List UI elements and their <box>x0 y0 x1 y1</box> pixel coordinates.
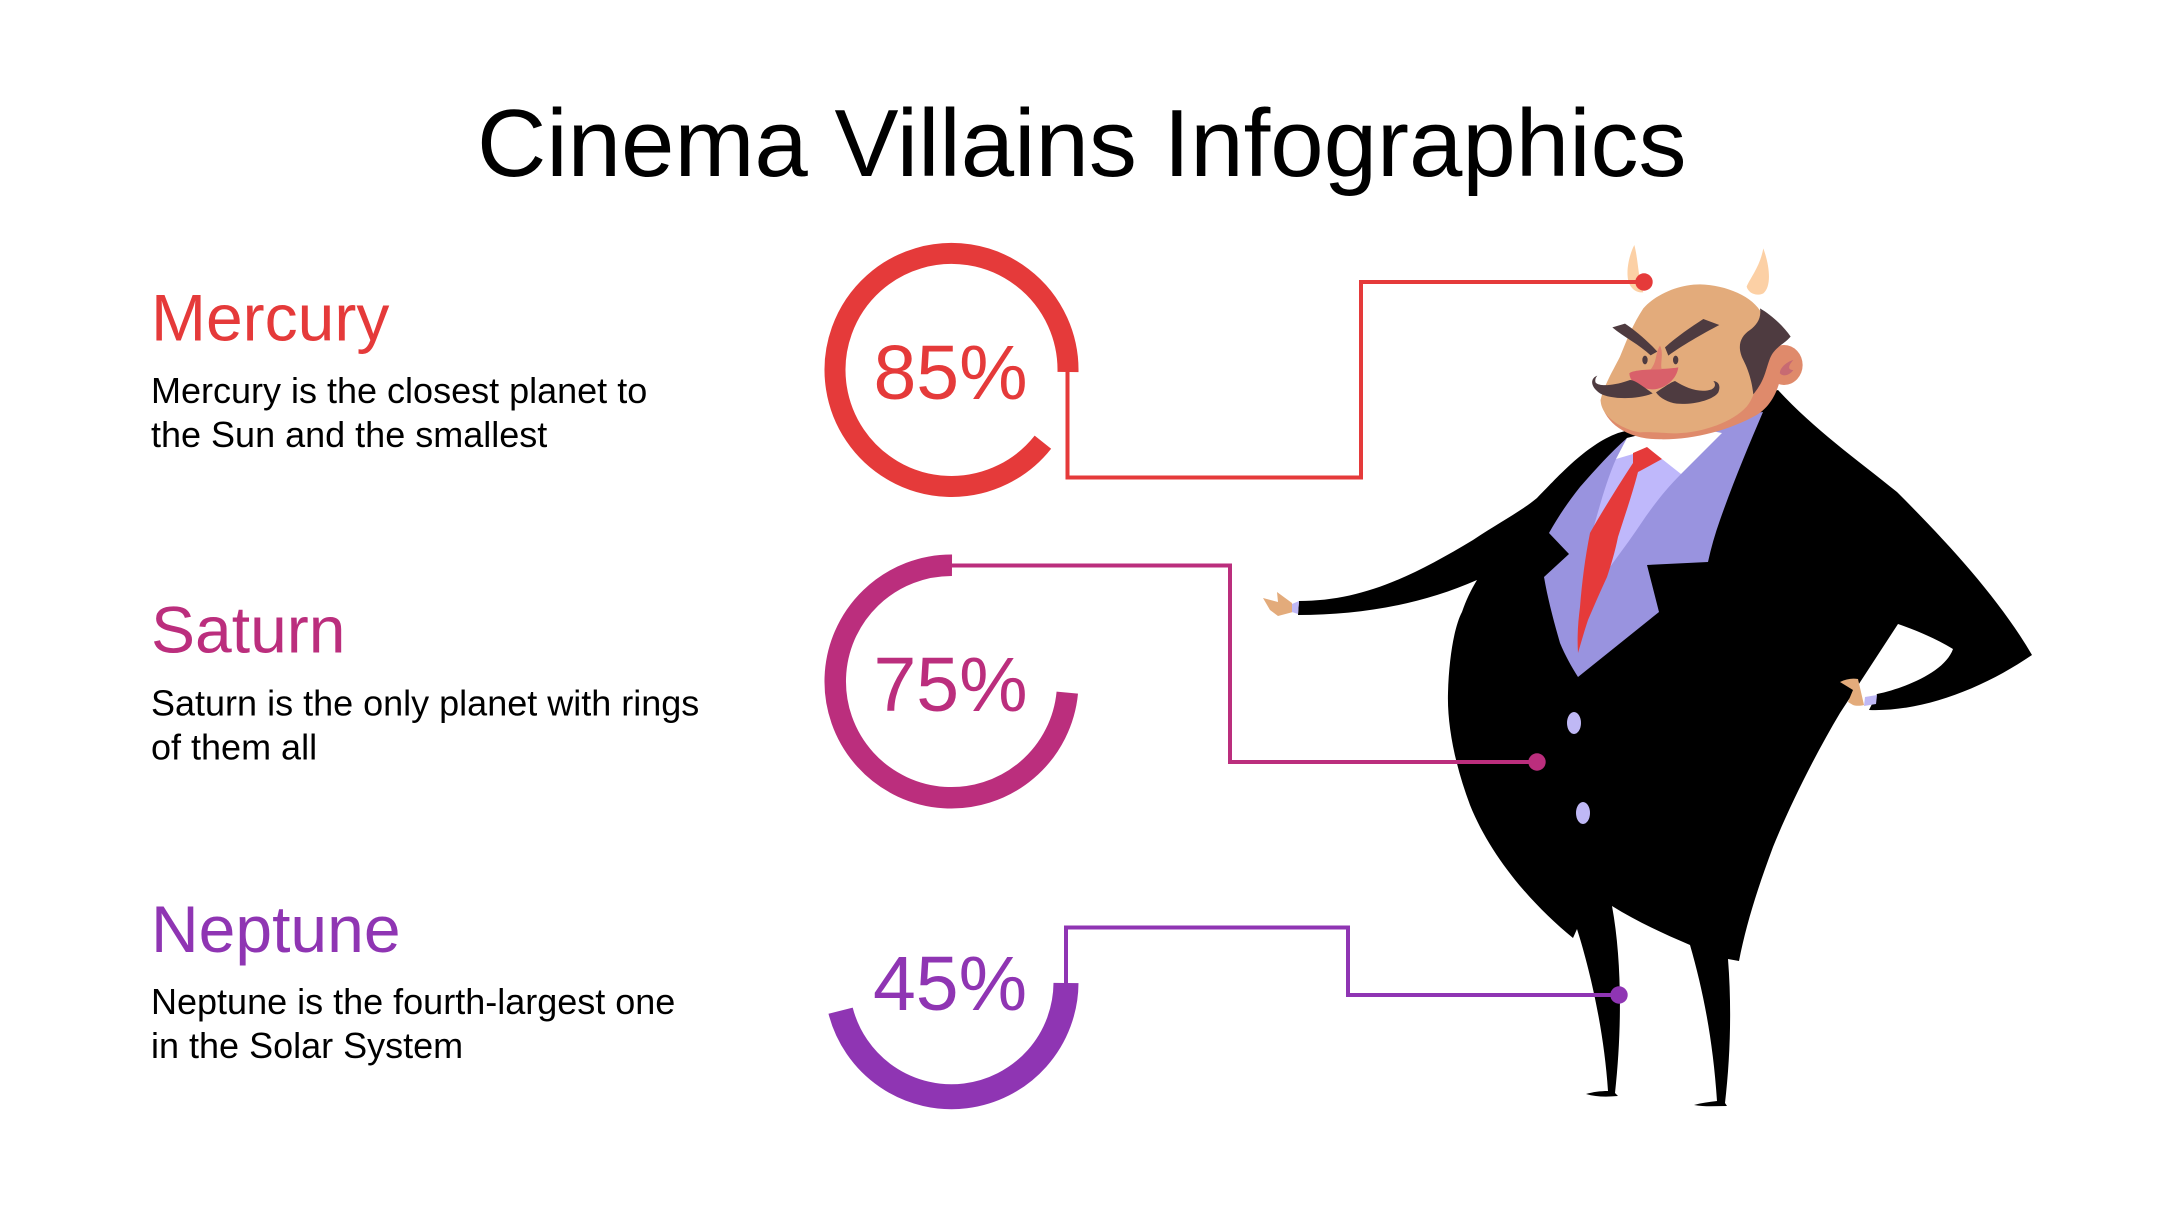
text: Neptune description: in the Solar System <box>151 1025 463 1066</box>
dot: horn <box>1635 273 1653 291</box>
dot: leg <box>1610 986 1628 1004</box>
left hand <box>1263 592 1299 616</box>
value: 45%: 45% <box>873 941 1027 1027</box>
black suit <box>1298 390 2032 1106</box>
panel: saturn <box>151 565 1546 798</box>
ring: 75% <box>835 565 1067 798</box>
right hand <box>1840 679 1877 706</box>
text: Neptune description: Neptune is the fourth-largest one <box>151 981 675 1022</box>
heading: Mercury: Mercury <box>151 280 389 354</box>
text: Saturn description: of them all <box>151 726 317 768</box>
connector: neptune to leg <box>1066 928 1619 995</box>
white collar <box>1616 425 1722 474</box>
title: Cinema Villains Infographics <box>477 90 1687 197</box>
buttons <box>1567 712 1590 824</box>
eyes <box>1642 356 1648 364</box>
panel: neptune <box>151 892 1628 1097</box>
ear <box>1765 345 1803 385</box>
heading: Saturn: Saturn <box>151 592 345 666</box>
villain character illustration <box>1263 245 2032 1106</box>
neck shade <box>1601 357 1780 439</box>
face <box>1601 284 1762 433</box>
text: Mercury description: the Sun and the smallest <box>151 414 547 455</box>
heading: Neptune: Neptune <box>151 892 401 966</box>
lilac shirt <box>1592 454 1681 567</box>
purple lapels <box>1544 412 1763 677</box>
ring: 85% <box>835 253 1068 486</box>
moustache <box>1592 376 1653 398</box>
connector: saturn to button <box>952 566 1537 762</box>
nose <box>1629 367 1678 389</box>
eyebrows <box>1612 324 1657 355</box>
red tie <box>1578 447 1662 653</box>
text: Mercury description: Mercury is the closest planet to <box>151 370 647 411</box>
value: 85%: 85% <box>873 330 1028 416</box>
hair <box>1740 308 1791 394</box>
horns <box>1627 245 1769 295</box>
dot: waist <box>1528 753 1546 771</box>
value: 75%: 75% <box>873 642 1028 728</box>
panel: mercury <box>151 253 1653 486</box>
connector: mercury to horn <box>1068 282 1644 478</box>
head <box>1592 284 1803 439</box>
text: Saturn description: Saturn is the only planet with rings <box>151 682 699 724</box>
ring: 45% <box>841 983 1066 1097</box>
